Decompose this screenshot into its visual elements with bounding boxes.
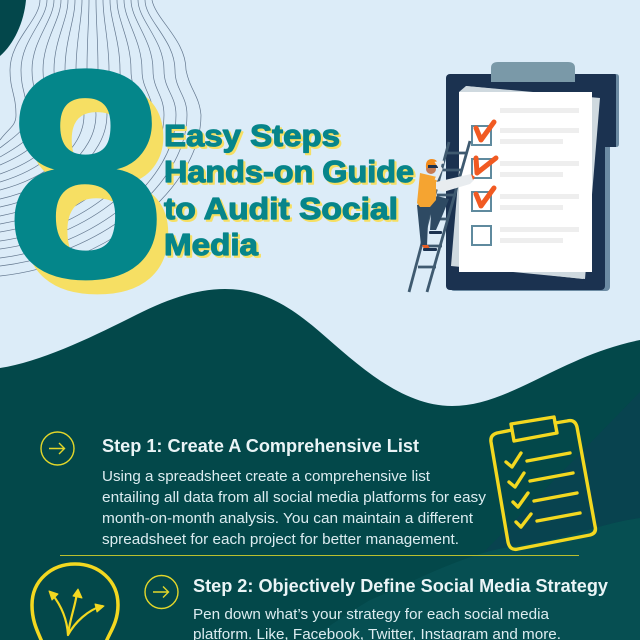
step 2 body: Pen down what’s your strategy for each social media — [193, 606, 550, 623]
step 1 body: month-on-month analysis. You can maintain a different — [102, 510, 474, 527]
step 2 heading: Step 2: Objectively Define Social Media Strategy — [193, 575, 609, 596]
title: to Audit Social — [164, 191, 398, 226]
step 2 arrow icon — [145, 576, 178, 608]
corner blob — [0, 0, 26, 56]
title: to Audit Social — [166, 193, 400, 228]
contour lines — [0, 0, 201, 276]
dark wave section — [0, 289, 640, 640]
title: Hands-on Guide — [164, 154, 414, 189]
title — [164, 118, 416, 264]
title: Hands-on Guide — [166, 156, 416, 191]
step 1 arrow icon — [41, 432, 74, 465]
step 1 body: spreadsheet for each project for better management. — [102, 531, 459, 548]
title: Easy Steps — [166, 120, 342, 155]
title: Media — [166, 229, 261, 264]
step 1 body — [102, 468, 487, 548]
step 1 body: entailing all data from all social media platforms for easy — [102, 489, 487, 506]
big number 8: 8 — [17, 22, 177, 354]
step 1 body: Using a spreadsheet create a comprehensive list — [102, 468, 431, 485]
step 2 lightbulb icon — [32, 564, 118, 640]
clipboard checklist icon — [491, 417, 595, 549]
divider — [60, 554, 579, 556]
big number 8: 8 — [6, 8, 165, 340]
clipboard illustration — [446, 62, 619, 291]
title: Easy Steps — [164, 118, 340, 153]
ladder and worker — [409, 141, 475, 292]
step 2 body — [193, 606, 561, 640]
worker — [417, 159, 475, 251]
step 1 heading: Step 1: Create A Comprehensive List — [102, 435, 419, 456]
background accent shapes — [310, 392, 640, 640]
title: Media — [164, 227, 259, 262]
